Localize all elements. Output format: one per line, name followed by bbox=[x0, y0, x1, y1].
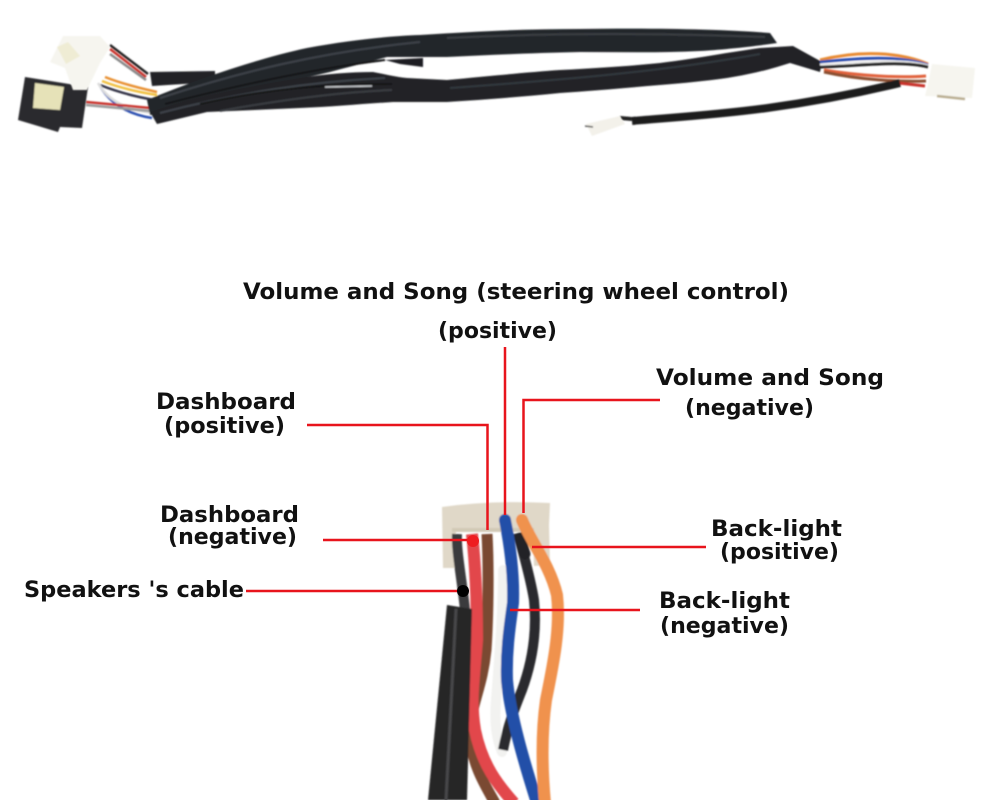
icon: black connector bbox=[18, 77, 88, 132]
red wire bbox=[472, 534, 514, 800]
marker: speakers cable dot bbox=[457, 585, 469, 597]
icon: white connector right bbox=[925, 64, 975, 99]
black sheath bbox=[428, 605, 472, 800]
label: dashboard negative: Dashboard bbox=[160, 502, 299, 528]
label: dashboard positive: Dashboard bbox=[156, 389, 296, 415]
white wire bbox=[495, 570, 503, 752]
brown wire bbox=[470, 534, 495, 800]
label: back-light positive bbox=[711, 516, 842, 565]
black wire inner bbox=[457, 534, 465, 610]
label: volume and song positive: (positive) bbox=[438, 318, 557, 344]
orange wire bbox=[522, 520, 558, 800]
blue wire bbox=[505, 520, 537, 800]
black wire right bbox=[503, 533, 535, 750]
icon: white connector top left bbox=[50, 36, 110, 90]
loop tip bbox=[385, 58, 423, 67]
label: back-light negative bbox=[659, 588, 790, 639]
label: volume and song positive: Volume and Song (steering wheel control) bbox=[243, 279, 789, 305]
label: volume and song negative: (negative) bbox=[685, 395, 814, 421]
label: dashboard positive: (positive) bbox=[164, 413, 285, 439]
label: dashboard negative bbox=[160, 502, 299, 550]
right loose wires bbox=[820, 54, 928, 86]
label: back-light positive: (positive) bbox=[720, 539, 839, 565]
lower cable branch bbox=[150, 46, 822, 124]
label: volume and song negative: Volume and Song bbox=[656, 365, 884, 391]
photo: wiring harness bbox=[86, 29, 928, 124]
label: back-light negative: (negative) bbox=[660, 613, 789, 639]
label: back-light positive: Back-light bbox=[711, 516, 842, 542]
photo: connector closeup bbox=[428, 502, 558, 800]
left stub cable bbox=[150, 71, 215, 86]
cable sheen bbox=[160, 42, 420, 98]
right black cable bbox=[632, 83, 900, 121]
label: volume and song positive bbox=[243, 279, 789, 344]
label: dashboard negative: (negative) bbox=[168, 524, 297, 550]
icon: small white connector bbox=[585, 116, 625, 136]
label: back-light negative: Back-light bbox=[659, 588, 790, 614]
callout lines bbox=[246, 347, 706, 610]
connector housing bbox=[442, 502, 550, 568]
left loose wires bbox=[86, 45, 157, 118]
label: dashboard positive bbox=[156, 389, 296, 439]
label: speakers cable: Speakers 's cable bbox=[24, 577, 244, 603]
label: volume and song negative bbox=[656, 365, 884, 421]
marker: dashboard negative dot bbox=[467, 535, 479, 547]
upper cable branch bbox=[147, 29, 777, 115]
